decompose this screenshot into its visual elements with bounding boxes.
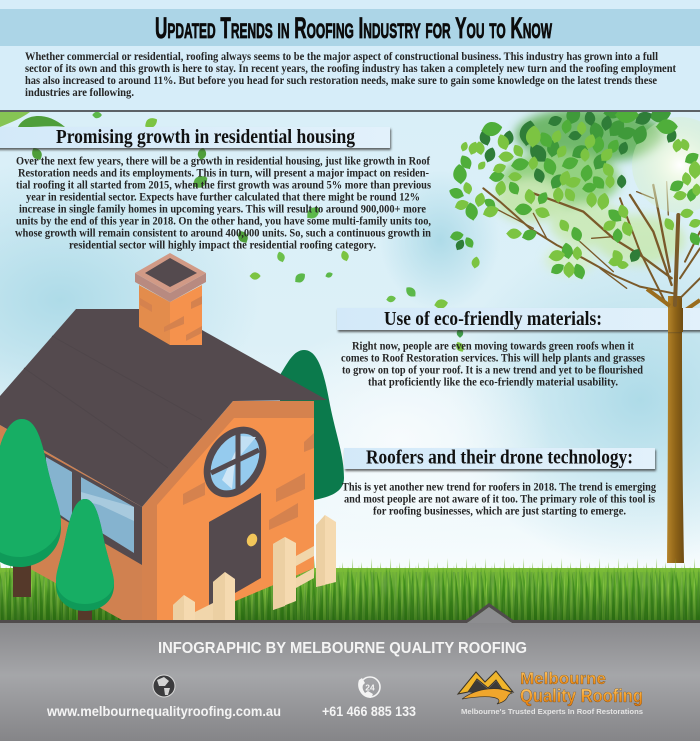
text block: eco-friendly: comes to Roof Restoration services. This will help plants and grasses [341, 352, 646, 364]
text block: residential housing: Over the next few years, there will be a growth in residential housing, just like growth in Roof [16, 156, 430, 168]
text block: residential housing: units by the end of this year in 2018. On the other hand, you have some multi-family units too, [16, 216, 431, 228]
intro text: Whether commercial or residential, roofing always seems to be the major aspect of constructional business. This industry has grown into a full [25, 51, 658, 63]
text block: drone technology [342, 482, 656, 518]
phone number: +61 466 885 133 [322, 704, 416, 719]
text block: residential housing: increase in single family homes in upcoming years. This will result to around 900,000+ more [19, 204, 426, 216]
text block: drone technology: This is yet another new trend for roofers in 2018. The trend is emerging [342, 482, 656, 494]
back tree [280, 350, 344, 500]
roof shading strips [24, 336, 202, 468]
logo [458, 669, 643, 716]
intro text: industries are following. [25, 87, 134, 99]
text block: eco-friendly: to grow on top of your roof. It is a new trend and yet to be flourished [342, 364, 644, 376]
leaves [447, 103, 700, 281]
left tree [0, 419, 61, 597]
sky background [0, 111, 700, 623]
chimney [135, 253, 206, 345]
bricks [142, 433, 314, 562]
footer top edge with notch [0, 603, 700, 623]
gable wall shade [142, 401, 314, 620]
footer heading: INFOGRAPHIC BY MELBOURNE QUALITY ROOFING [158, 640, 527, 657]
trunk [667, 296, 684, 563]
side wall [0, 425, 142, 620]
small tree [56, 499, 114, 620]
door [209, 493, 261, 624]
text block: eco-friendly: that proficiently like the eco-friendly material usability. [368, 376, 618, 388]
icon: globe [153, 675, 175, 697]
branches [483, 182, 700, 305]
sun glow [632, 117, 700, 213]
fence [173, 515, 336, 620]
side branches at trunk [646, 287, 700, 308]
text block: residential housing: Restoration needs and its employments. This in turn, will present a major impact on residen- [18, 168, 429, 180]
grass [0, 556, 700, 622]
gable wall [157, 418, 314, 620]
side windows [30, 445, 142, 565]
roof [0, 309, 327, 507]
tree on right [447, 103, 700, 563]
icon: 24h phone: 24 [365, 682, 375, 692]
trunk over banner [668, 308, 683, 332]
logo tagline: Melbourne's Trusted Experts In Roof Restorations [461, 709, 643, 716]
text block: residential housing [15, 156, 432, 252]
text block: eco-friendly: Right now, people are even moving towards green roofs when it [352, 340, 634, 352]
website url: www.melbournequalityroofing.com.au [46, 704, 281, 719]
footer [0, 603, 700, 741]
notch fill [467, 607, 512, 623]
falling leaves and top-left foliage [0, 112, 466, 354]
heading text: Use of eco-friendly materials: [384, 308, 602, 330]
heading text: Roofers and their drone technology: [366, 446, 633, 468]
round window [191, 415, 279, 509]
title band [0, 9, 700, 46]
heading text: Promising growth in residential housing [56, 126, 356, 148]
house [0, 253, 327, 624]
text block: drone technology: for roofing businesses, which are just starting to emerge. [373, 506, 626, 518]
text block: eco-friendly [341, 340, 646, 388]
text block: drone technology: and most people are not aware of it too. The primary role of this tool is [344, 494, 656, 506]
intro text: has also increased to around 11%. But before you head for such restoration needs, make sure to gain some knowledge on the latest trends these [25, 75, 657, 87]
logo name second line: Quality Roofing [520, 686, 643, 706]
logo icon: roof [458, 671, 513, 704]
foliage glow [495, 107, 685, 274]
heading banner: eco-friendly [337, 308, 700, 330]
intro text [25, 51, 676, 99]
heading banner: drone technology [344, 446, 655, 469]
text block: residential housing: residential sector will highly impact the residential roofing category. [69, 240, 376, 252]
heading banner: promising growth [0, 126, 390, 148]
icon: 24h phone [358, 677, 380, 698]
text block: residential housing: year in residential sector. Expects have further calculated that there might be round 12% [26, 192, 420, 204]
text block: residential housing: whose growth will remain consistent to around 400,000 units. So, such a continuous growth in [15, 228, 432, 240]
intro panel [0, 0, 700, 112]
text block: residential housing: tial roofing it all started from 2015, when the first growth was around 5% more than previous [16, 180, 432, 192]
logo name: Melbourne [520, 669, 606, 688]
